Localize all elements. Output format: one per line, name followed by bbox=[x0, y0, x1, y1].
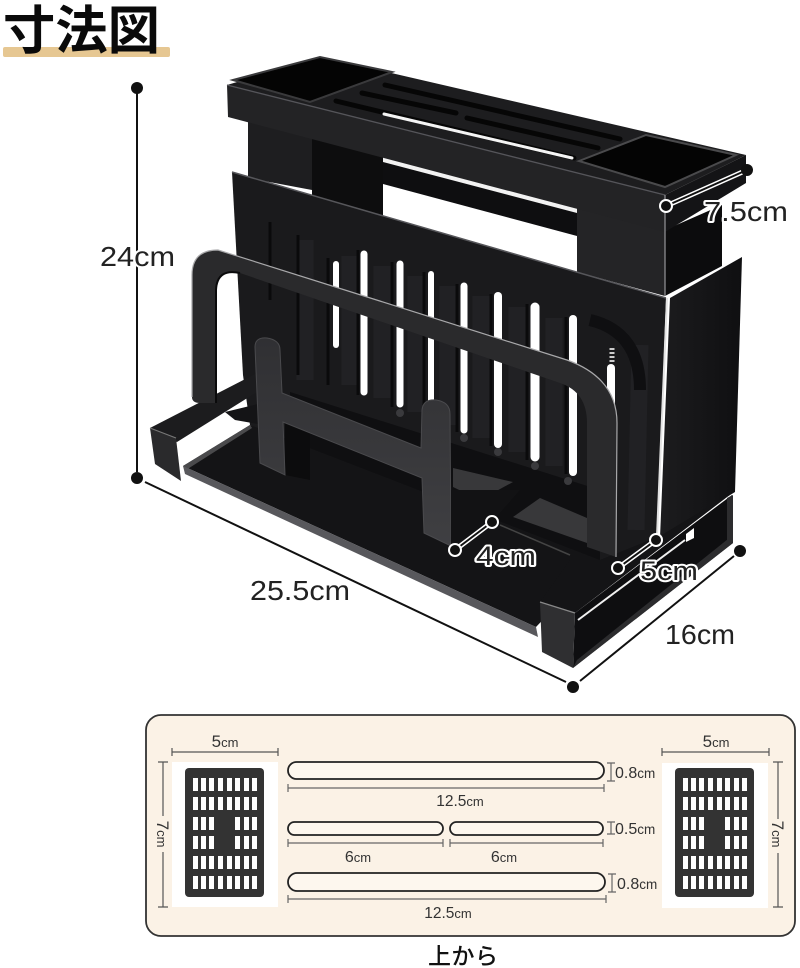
knife slot row 2: 0.5cm bbox=[615, 821, 655, 838]
knife slot row 2: 6cm bbox=[345, 849, 371, 866]
dimension: divider 4cm: 4cm bbox=[476, 541, 536, 571]
dimension: cup 7.5cm bbox=[660, 164, 788, 227]
product illustration: knife and cutting board rack bbox=[150, 57, 746, 668]
right cup grid bbox=[662, 763, 768, 908]
knife slot row 3: 0.8cm bbox=[617, 876, 657, 893]
dimension: cup 7.5cm: 7.5cm bbox=[704, 196, 788, 227]
top knife block bbox=[227, 57, 746, 296]
title: 寸法図 bbox=[3, 3, 160, 61]
dimension: divider 4cm bbox=[449, 516, 536, 571]
knife slot row 2: 6cm bbox=[491, 849, 517, 866]
title highlight underline bbox=[3, 47, 170, 57]
dimension: height 24cm bbox=[100, 82, 175, 484]
base frame and drip tray bbox=[150, 373, 735, 668]
rear upper legs and window bbox=[248, 118, 722, 296]
board holder arch bbox=[192, 250, 617, 557]
lower shelf bbox=[290, 392, 600, 565]
right cup dimensions bbox=[662, 748, 783, 907]
ventilation slots bbox=[270, 222, 566, 474]
right 7cm label: 7 cm bbox=[768, 821, 787, 847]
upper right shadow bbox=[590, 320, 640, 390]
dimension: depth 16cm: 16cm bbox=[665, 619, 735, 650]
knife slots bbox=[336, 85, 620, 158]
left cup bbox=[233, 57, 392, 102]
dimension: depth 16cm bbox=[580, 545, 746, 681]
floor between body and front rail bbox=[540, 491, 735, 613]
dimension: height 24cm: 24cm bbox=[100, 241, 175, 272]
right cup bbox=[579, 135, 736, 187]
left 7cm label: 7 cm bbox=[153, 821, 172, 847]
knife slot row 2 bbox=[288, 821, 655, 866]
knife divider H frame bbox=[255, 338, 520, 546]
left cup dimensions bbox=[158, 748, 278, 907]
knife slot row 3 bbox=[288, 873, 657, 922]
knife slot row 1: 12.5cm bbox=[436, 793, 484, 810]
left 5cm label: 5cm bbox=[212, 732, 238, 751]
right 5cm label: 5cm bbox=[703, 732, 729, 751]
left cup grid bbox=[172, 762, 278, 907]
main back panel bbox=[232, 172, 742, 565]
knife slot row 1: 0.8cm bbox=[615, 765, 655, 782]
panel ribs bbox=[305, 240, 640, 530]
dimension: holder 5cm bbox=[612, 534, 698, 586]
knife slot row 3: 12.5cm bbox=[424, 905, 472, 922]
dimension: width 25.5cm bbox=[145, 482, 579, 693]
knife slot row 1 bbox=[288, 762, 655, 810]
dimension: holder 5cm: 5cm bbox=[640, 556, 698, 586]
dimension: width 25.5cm: 25.5cm bbox=[250, 575, 350, 606]
panel: top view diagram bbox=[146, 715, 795, 936]
